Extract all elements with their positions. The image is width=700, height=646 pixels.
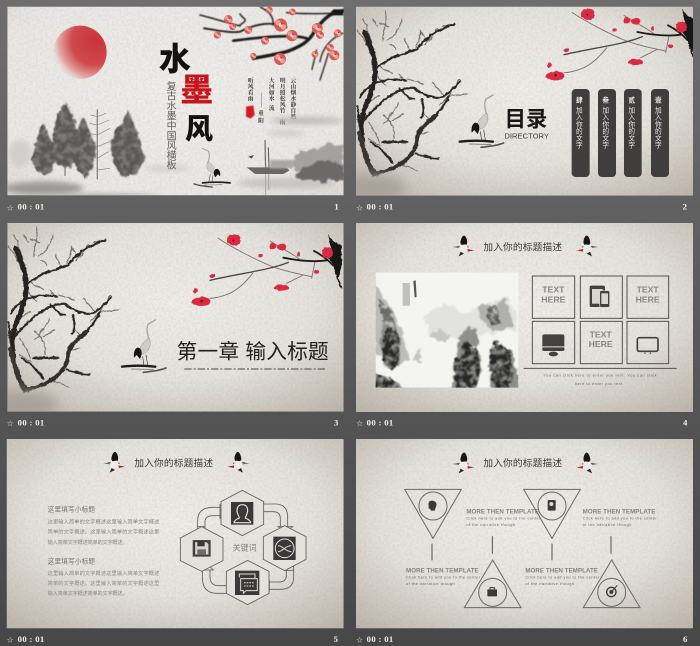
header right bird — [577, 236, 598, 256]
plum blossoms — [214, 7, 342, 65]
calligraphy poem: 大河如水流 — [269, 77, 275, 112]
text block 1: 这里输入简单的文字概述这里输入简单文字概述 — [48, 518, 159, 526]
text block 4: of the narrative though — [583, 523, 631, 527]
chapter title: 第一章 输入标题 — [177, 340, 329, 363]
footer: page number: 1 — [334, 201, 339, 211]
title: water ink style: 墨 — [180, 71, 213, 108]
text block 3: MORE THEN TEMPLATE — [525, 568, 598, 575]
header title: 加入你的标题描述 — [483, 458, 562, 470]
footer: time — [356, 418, 394, 428]
grid cell: text 3 — [580, 321, 622, 364]
ground fade — [356, 167, 408, 196]
ground fade — [0, 392, 58, 418]
text block 1: 简单的文字概述。这里输入简单的文字概述这里 — [48, 528, 159, 536]
pill 1: 加入你的文字 — [576, 106, 583, 150]
text block 3 — [525, 568, 600, 586]
triangle 2 with phone icon — [524, 489, 580, 538]
footer: time — [7, 418, 45, 428]
hexagon: top — [221, 490, 264, 536]
footer: page number: 6 — [683, 634, 688, 644]
title: water ink style: 风 — [185, 113, 213, 144]
landscape painting — [373, 272, 518, 392]
footer: page number: 3 — [334, 418, 339, 428]
dash-dot rule — [184, 368, 325, 370]
triangle 3 with briefcase icon — [464, 560, 521, 608]
plum branch — [200, 7, 343, 80]
caption — [543, 373, 657, 386]
paper background — [356, 439, 693, 628]
paper background — [356, 223, 693, 412]
text block 1 — [48, 505, 159, 546]
header title: 加入你的标题描述 — [134, 458, 213, 470]
footer: time: 00 : 01 — [18, 201, 45, 211]
footer: time: ☆ — [356, 419, 363, 428]
text block 3: of the narrative though — [525, 582, 574, 586]
arrow: top to right — [264, 504, 293, 533]
header left bird — [452, 453, 474, 473]
boat — [247, 140, 293, 195]
hexagon: left — [180, 527, 223, 571]
triangle 1 with head icon — [405, 489, 461, 538]
calligraphy poem: 明月照松风竹雨 — [280, 77, 286, 126]
slide 3: chapter — [0, 223, 344, 428]
footer: time: 00 : 01 — [18, 418, 45, 428]
text block 2: of the narrative though — [466, 523, 515, 527]
footer: time: 00 : 01 — [18, 634, 45, 644]
icon: save — [193, 540, 211, 557]
grid cell: text 3: TEXT — [590, 329, 612, 339]
crane — [122, 320, 166, 372]
grid cell: text 3: HERE — [589, 339, 613, 349]
ink trees wash — [32, 102, 144, 177]
paper background — [7, 223, 344, 412]
caption: You can click here to enter you text. You can click — [543, 373, 657, 378]
bare pine tree — [88, 109, 110, 179]
bare ink tree — [8, 227, 118, 390]
keyword: 关键词 — [233, 543, 257, 553]
grid cell: text 1: HERE — [541, 294, 566, 304]
text block 2: 输入简单文字概述简单的文字概述。 — [48, 589, 128, 597]
tree trunks — [44, 163, 128, 178]
header right bird — [577, 453, 598, 473]
connector 4 — [609, 537, 612, 553]
grid cell: text 2: HERE — [636, 294, 660, 304]
text block 4: MORE THEN TEMPLATE — [583, 509, 655, 516]
footer: time: ☆ — [7, 203, 14, 212]
pill 3 — [624, 89, 642, 177]
calligraphy poem: 云山烟水静自然 — [290, 77, 297, 121]
mountains — [293, 144, 344, 182]
footer: time — [356, 634, 394, 644]
footer: time — [356, 201, 394, 212]
slide 1: cover — [3, 7, 344, 212]
grid cell: text 2 — [627, 276, 669, 318]
text block 4: Click here to add you to the center — [583, 517, 657, 521]
text block 2: 简单的文字概述。这里输入简单的文字概述这里 — [48, 579, 159, 587]
text block 1: Click here to add you to the center — [406, 576, 481, 580]
slide 2: directory — [333, 7, 696, 212]
connector 1 — [430, 544, 433, 560]
pill 2: 加入你的文字 — [602, 106, 609, 150]
calligraphy poem: 重阳 — [258, 109, 264, 125]
paper background — [7, 439, 344, 628]
pill 1: 肆 — [576, 96, 583, 105]
grid cell: monitor icon — [532, 321, 575, 364]
title: water ink style: 水 — [159, 41, 191, 77]
footer: time: ☆ — [356, 203, 363, 212]
vertical subtitle: 复古水墨中国风横板 — [167, 80, 177, 172]
triangle 4 with target icon — [583, 560, 640, 608]
text block 4 — [583, 509, 657, 527]
grid cell: text 2: TEXT — [637, 285, 659, 295]
header right bird — [228, 452, 249, 473]
grid cell: devices icon — [580, 276, 622, 318]
text block 2: Click here to add you to the center — [466, 517, 541, 521]
subtitle: DIRECTORY — [504, 131, 549, 140]
header left bird — [452, 236, 474, 256]
text block 2: MORE THEN TEMPLATE — [466, 509, 539, 516]
pill 3: 加入你的文字 — [628, 106, 635, 150]
distant mist — [237, 117, 343, 189]
connector 2 — [491, 537, 494, 553]
paper background — [356, 7, 693, 196]
cycle diagram — [180, 490, 306, 605]
bare ink tree — [357, 11, 467, 174]
calligraphy poem — [248, 77, 297, 126]
footer: time: ☆ — [7, 419, 14, 428]
footer: time — [7, 201, 45, 212]
footer: page number: 2 — [683, 201, 687, 211]
slide 6: triangles — [356, 439, 693, 644]
icon: chat — [235, 571, 259, 595]
red seal — [246, 105, 255, 119]
grid cell: text 1: TEXT — [542, 285, 565, 295]
footer: page number: 4 — [683, 418, 688, 428]
arrow: left to top — [198, 505, 227, 533]
title: 目录 — [505, 108, 547, 132]
text block 2 — [466, 509, 541, 527]
footer: time: 00 : 01 — [367, 634, 394, 644]
text block 1: of the narrative though — [406, 582, 455, 586]
rule under grid — [524, 367, 677, 370]
crane — [460, 95, 504, 147]
red plum branch — [546, 9, 696, 80]
text block 1: 这里填写小标题 — [48, 505, 95, 514]
footer: time — [7, 634, 45, 644]
pill 4: 壹 — [655, 96, 662, 105]
arrow: bottom to left — [199, 563, 227, 593]
pill 2: 叁 — [602, 96, 609, 105]
connector 3 — [550, 544, 553, 560]
pill 2 — [598, 89, 616, 177]
footer: time: 00 : 01 — [367, 418, 394, 428]
footer: time: ☆ — [7, 635, 14, 644]
calligraphy poem: 听风看雨 — [248, 77, 254, 103]
text block 3: Click here to add you to the center — [525, 576, 600, 580]
red plum branch — [192, 234, 342, 306]
text block 2 — [48, 556, 159, 597]
title: water ink style — [159, 41, 213, 144]
paper background — [7, 7, 344, 195]
caption: here to enter you text. — [575, 381, 624, 386]
arrow: right to bottom — [263, 564, 294, 591]
text block 2: 这里输入简单的文字概述这里输入简单文字概述 — [48, 569, 159, 577]
red sun — [53, 26, 107, 79]
footer: time: ☆ — [356, 635, 363, 644]
slide 4: image and grid — [356, 223, 693, 428]
pill 4: 加入你的文字 — [655, 106, 662, 150]
grid cell: text 1 — [532, 276, 575, 318]
pill 3: 贰 — [628, 96, 635, 105]
text block 1 — [406, 568, 481, 586]
slide 5: keyword cycle — [7, 439, 344, 644]
hexagon: right — [263, 526, 306, 571]
footer: page number: 5 — [334, 634, 339, 644]
footer: time: 00 : 01 — [367, 201, 394, 211]
text block 1: MORE THEN TEMPLATE — [406, 568, 479, 575]
ink fog — [3, 139, 190, 201]
crane — [194, 148, 230, 187]
ink trees foliage — [32, 102, 144, 177]
pill 4 — [651, 89, 669, 177]
icon: user — [231, 502, 253, 525]
header title: 加入你的标题描述 — [483, 241, 562, 253]
text block 1: 输入简单文字概述简单的文字概述。 — [48, 538, 128, 546]
icon: shuffle — [273, 537, 296, 560]
hexagon: bottom — [226, 560, 269, 605]
grid cell: screen icon — [627, 321, 669, 364]
pill 1 — [572, 89, 590, 177]
header left bird — [103, 452, 125, 473]
text block 2: 这里填写小标题 — [48, 556, 95, 565]
